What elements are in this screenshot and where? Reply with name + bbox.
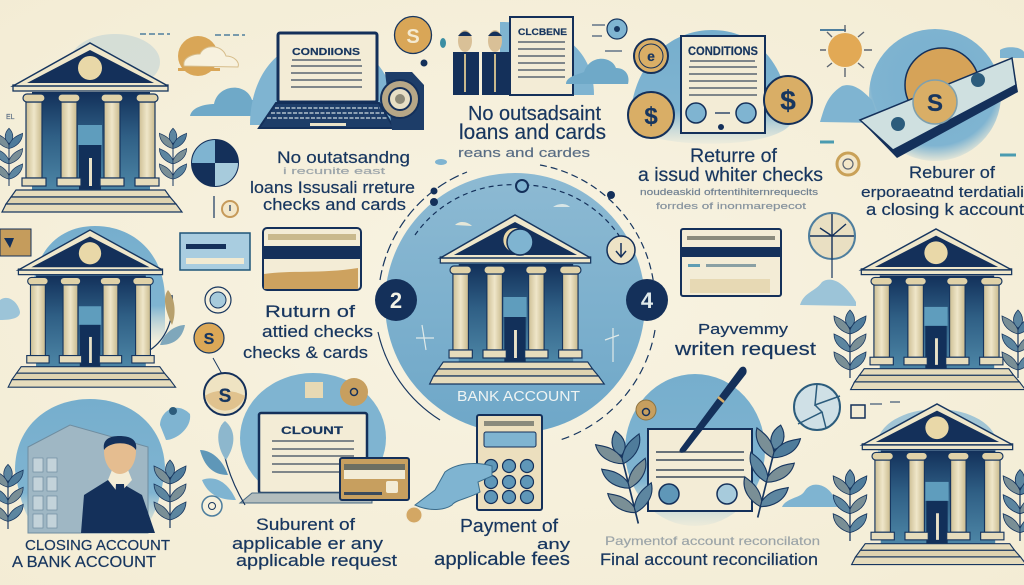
icon: right laurel, top bank	[159, 128, 187, 186]
icon: laptop and credit card: CLOUNT	[281, 425, 343, 437]
icon: pale cloud at left edge	[0, 298, 20, 320]
text: return of issued checks: noudeaskid ofrtentihiternrequeclts	[640, 187, 818, 198]
icon: blue cloud beside document	[566, 59, 628, 84]
text: return of closing account	[861, 163, 1024, 219]
icon: conditions document with coins: $	[644, 103, 658, 130]
text: closing a bank account: A BANK ACCOUNT	[12, 554, 156, 571]
text: closing a bank account	[12, 537, 170, 571]
icon: small target	[592, 19, 627, 51]
badge: number 4	[626, 279, 668, 321]
icon: right laurel of certificate	[736, 420, 802, 523]
badge: number 2: 2	[390, 288, 402, 313]
icon: leaf branch beside left bank	[150, 290, 185, 350]
icon: conditions document with coins: CONDITIONS	[688, 46, 758, 58]
text: no outstanding, left block	[250, 148, 415, 214]
icon: quarter pie chart	[192, 140, 238, 186]
icon: blue cloud left of laptop	[190, 88, 280, 116]
text: closing a bank account: CLOSING ACCOUNT	[25, 537, 170, 554]
icon: laurel left of right bank	[834, 310, 866, 378]
icon: laptop with conditions: CONDIIONS	[292, 46, 360, 58]
text: no outstanding, left block: i recunite east	[283, 166, 386, 176]
text: no outstanding loans and cards, top centre: reans and cardes	[458, 145, 591, 160]
text: payment of any applicable fees: any	[537, 536, 571, 553]
icon: stack of money with coin: S	[927, 90, 943, 117]
text: payment, written request: Payvemmy	[698, 321, 789, 338]
icon: small gold seal	[636, 400, 656, 420]
bank: left middle	[8, 226, 176, 387]
icon: conditions document with coins: $	[780, 85, 796, 116]
icon: s coin lens	[204, 373, 246, 415]
icon: small blue card	[180, 233, 250, 270]
text: submission of applicable request: Suburent of	[256, 515, 355, 534]
icon: closing document: CLCBENE	[518, 27, 567, 37]
icon: signed certificate and pen	[625, 367, 765, 526]
bank: right middle	[851, 229, 1024, 390]
text: final account reconciliation	[600, 534, 820, 569]
text: no outstanding, left block: No outatsandng	[277, 148, 410, 167]
icon: stack of money with coin	[860, 29, 1018, 161]
icon: small scattered marks: EL	[6, 114, 15, 121]
text: submission of applicable request: applicable er any	[232, 534, 384, 553]
icon: calculator and hand	[406, 415, 542, 523]
text: no outstanding loans and cards, top centre: No outsadsaint	[468, 103, 601, 125]
icon: two business people	[453, 22, 594, 95]
text: return of closing account: a closing k account	[866, 200, 1024, 219]
badge: number 2	[375, 279, 417, 321]
icon: laurel left of bottom bank	[833, 470, 867, 541]
icon: small gold coin by laptop	[305, 378, 368, 406]
icon: left laurel of certificate	[594, 426, 660, 529]
icon: small gold coin: S	[204, 331, 215, 348]
text: payment, written request	[674, 321, 816, 359]
text: return of issued checks: Returre of	[690, 146, 778, 167]
icon: blue cloud beside bottom bank	[782, 485, 839, 507]
icon: laurel right of bottom bank	[1003, 470, 1024, 541]
text: payment of any applicable fees: Payment of	[460, 516, 559, 536]
text: return of checks and cards: attied checks	[262, 322, 373, 341]
text: submission of applicable request: applicable request	[236, 551, 397, 570]
icon: conditions document with coins	[628, 30, 812, 144]
text: payment of any applicable fees: applicable fees	[434, 549, 570, 569]
icon: laurel at right edge	[1002, 310, 1024, 378]
icon: gold dollar coin: S	[406, 26, 420, 48]
text: return of checks and cards	[243, 302, 373, 362]
icon: camera safe	[381, 72, 424, 130]
text: payment of any applicable fees	[434, 516, 571, 569]
icon: small g badge	[202, 496, 222, 516]
text: return of issued checks	[638, 146, 823, 212]
icon: small blue droplet	[160, 407, 190, 440]
central circle: bank account	[378, 165, 655, 440]
text: return of checks and cards: Ruturn of	[265, 302, 355, 321]
text: return of closing account: Reburer of	[909, 163, 995, 182]
icon: small gold coin	[194, 323, 224, 374]
icon: gold bank card	[263, 228, 361, 290]
text: return of checks and cards: checks & cards	[243, 343, 368, 362]
icon: gold ring	[837, 153, 859, 175]
text: no outstanding loans and cards, top centre: loans and cards	[459, 121, 606, 144]
icon: s coin lens: S	[219, 386, 231, 407]
text: return of issued checks: forrdes of inonmarepecot	[656, 201, 806, 212]
icon: corner tile	[0, 229, 31, 256]
text: final account reconciliation: Final account reconciliation	[600, 550, 818, 569]
icon: laptop with conditions	[250, 33, 398, 128]
icon: ring seal	[205, 287, 231, 313]
text: return of issued checks: a issud whiter checks	[638, 165, 823, 186]
icon: gold sun and cloud	[178, 36, 238, 76]
text: return of closing account: erporaeatnd terdatiali	[861, 184, 1024, 201]
icon: blue cloud under compass	[800, 280, 856, 306]
icon: gold dollar coin	[394, 16, 432, 54]
badge: number 4: 4	[641, 288, 654, 313]
text: no outstanding, left block: checks and cards	[263, 195, 406, 214]
icon: segmented pie dial	[794, 384, 840, 430]
text: bank account label: BANK ACCOUNT	[457, 388, 580, 405]
icon: conditions document with coins: e	[647, 48, 655, 64]
icon: sun	[820, 25, 872, 77]
text: final account reconciliation: Paymentof account reconcilaton	[605, 534, 820, 548]
bank: top left	[2, 34, 182, 212]
icon: laurel left of businessman	[0, 464, 23, 529]
bank: bottom right	[852, 404, 1024, 565]
icon: small tile	[851, 402, 900, 418]
text: submission of applicable request	[232, 515, 397, 570]
icon: clock compass	[809, 213, 855, 278]
icon: laptop and credit card	[240, 373, 409, 503]
text: no outstanding loans and cards, top centre	[458, 103, 606, 160]
icon: blue cloud under sun	[820, 85, 880, 123]
icon: closing document	[510, 17, 573, 95]
icon: left laurel, top bank	[0, 128, 23, 186]
icon: small gold ring	[214, 196, 238, 218]
icon: businessman and building	[15, 399, 165, 533]
icon: small scattered marks	[6, 29, 1024, 194]
text: payment, written request: writen request	[674, 339, 816, 359]
icon: payment card, right	[681, 229, 781, 296]
icon: laurel right of businessman	[154, 460, 186, 528]
icon: leaf branch left of laptop	[200, 421, 245, 505]
text: no outstanding, left block: loans Issusali rreture	[250, 178, 415, 197]
